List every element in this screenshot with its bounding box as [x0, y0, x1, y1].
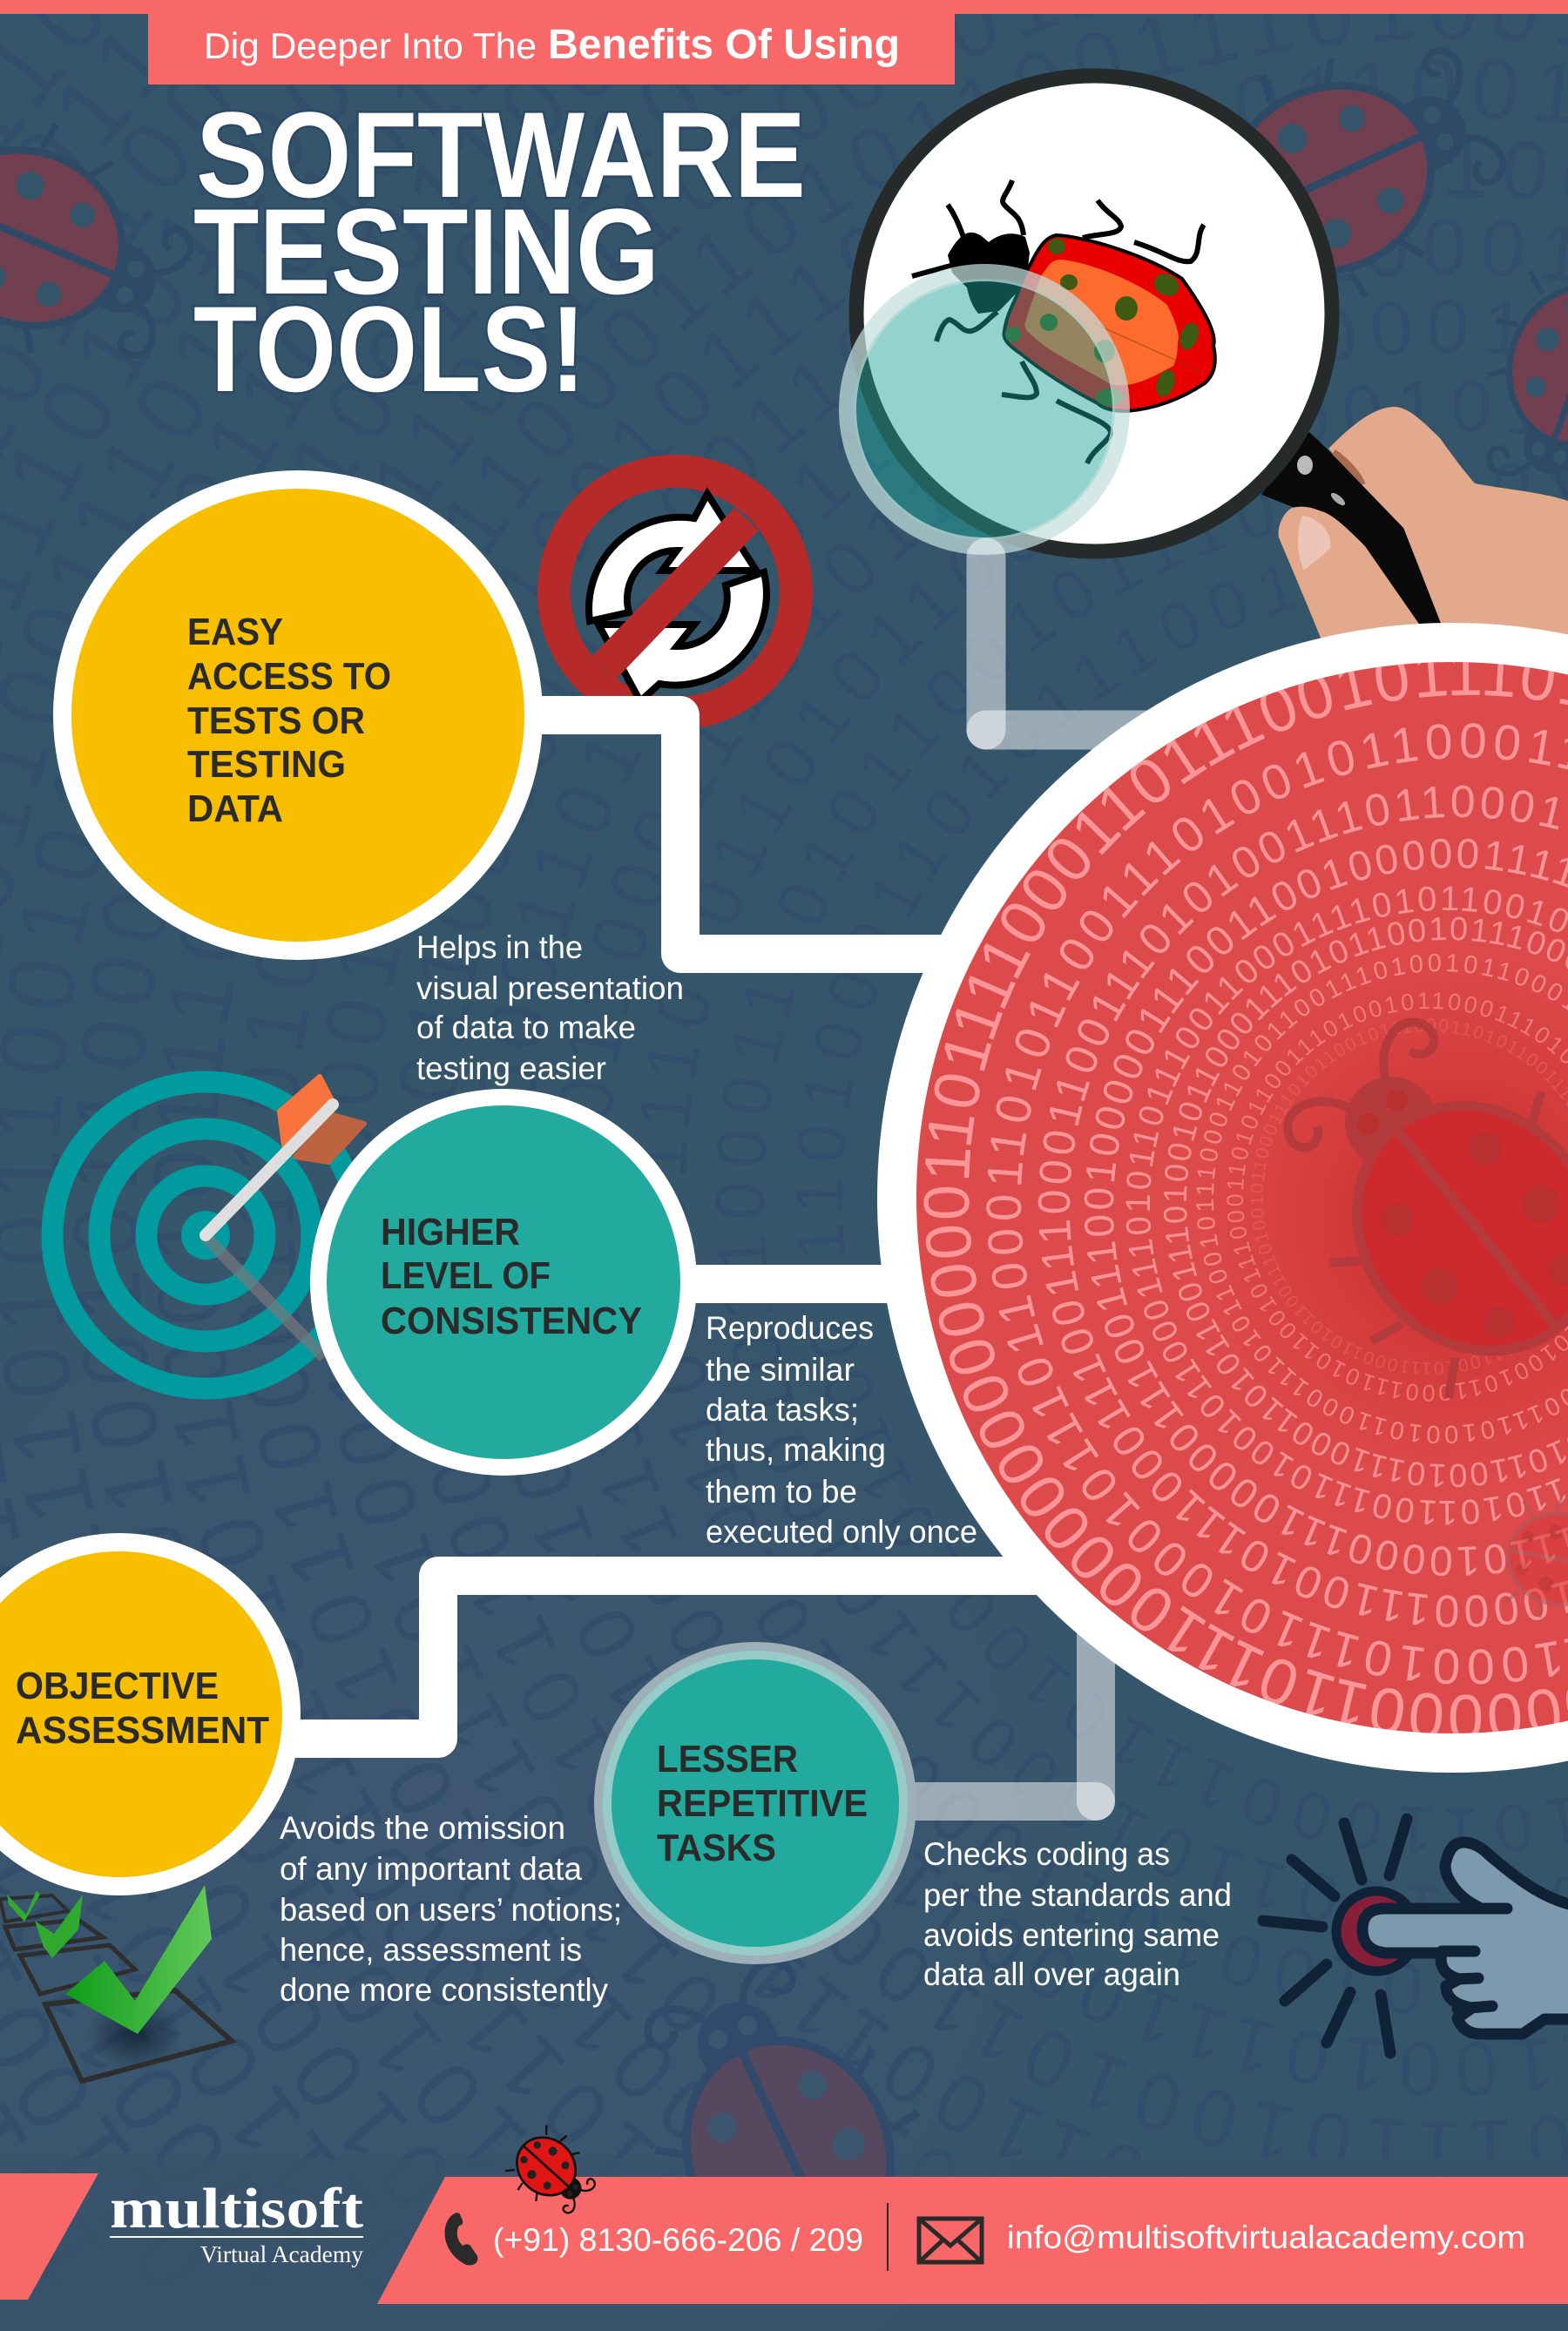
text: avoids the omission: done more consistently [280, 1972, 608, 2008]
text: avoids the omission: of any important data [280, 1851, 582, 1887]
yellow circle: easy access: TESTING [187, 743, 346, 786]
text: reproduces the similar data tasks: executed only once [706, 1514, 977, 1550]
logo: Virtual Academy [200, 2241, 363, 2267]
yellow circle: easy access: DATA [187, 787, 283, 830]
icon: checklist with green tick [0, 1885, 232, 2081]
ladybug in circle [1283, 1017, 1568, 1399]
connector: consistency to main circle [679, 1265, 923, 1303]
teal circle: higher level of consistency [310, 1089, 697, 1476]
text: reproduces the similar data tasks: Reproduces [706, 1310, 874, 1346]
yellow circle: easy access [53, 470, 543, 960]
small ladybug [499, 2118, 607, 2226]
title [193, 86, 806, 417]
icon: hand holding magnifier [1263, 407, 1568, 679]
logo: multisoft [110, 2177, 363, 2240]
faint ladybug: left [0, 93, 215, 405]
icon: target with arrow [52, 1077, 364, 1388]
logo [110, 2177, 363, 2267]
faint ladybug: top right [1186, 0, 1531, 333]
title: SOFTWARE [196, 86, 806, 223]
title: TESTING [193, 183, 659, 320]
banner [148, 9, 955, 84]
teal circle: higher level of consistency: LEVEL OF [381, 1254, 551, 1297]
text: reproduces the similar data tasks: data tasks; [706, 1392, 859, 1428]
yellow circle: easy access: TESTS OR [187, 699, 365, 742]
icon: no sync sign [554, 471, 796, 713]
main circle: binary tunnel with ladybug [877, 623, 1568, 1773]
top bar [0, 0, 1568, 14]
connector: lesser repetitive tasks to main circle [906, 1568, 1096, 1801]
yellow circle: objective assessment: ASSESSMENT [16, 1709, 269, 1752]
ladybug under glass [912, 180, 1215, 463]
teal circle: lesser repetitive tasks: TASKS [657, 1827, 776, 1869]
icon: finger pressing button [1263, 1819, 1568, 2053]
yellow circle: objective assessment: OBJECTIVE [16, 1665, 219, 1707]
text: checks coding: data all over again [923, 1956, 1180, 1992]
footer background [0, 2159, 1568, 2331]
binary rings [923, 662, 1568, 1733]
text: reproduces the similar data tasks: thus, making [706, 1432, 886, 1468]
yellow circle: objective assessment [0, 1533, 301, 1895]
text: checks coding: per the standards and [923, 1877, 1232, 1913]
text: avoids the omission: hence, assessment is [280, 1932, 582, 1968]
text: helps in the visual presentation: Helps in the [416, 929, 583, 965]
text: checks coding: Checks coding as [923, 1836, 1170, 1872]
connector: magnifier to main circle [986, 557, 1237, 730]
email: info@multisoftvirtualacademy.com [1007, 2220, 1525, 2255]
title: TOOLS! [193, 280, 585, 417]
faint ladybug: bottom [591, 1931, 957, 2311]
connector: easy access to main circle [514, 715, 976, 954]
divider [887, 2203, 889, 2271]
text: reproduces the similar data tasks: them to be [706, 1474, 857, 1510]
connector: objective assessment to main circle [287, 1576, 1132, 1739]
text: helps in the visual presentation: visual presentation [416, 970, 684, 1006]
teal circle: higher level of consistency: HIGHER [381, 1211, 520, 1253]
text: checks coding [923, 1836, 1232, 1992]
teal lens [848, 273, 1121, 546]
text: helps in the visual presentation: of data to make [416, 1010, 636, 1045]
teal circle: higher level of consistency: CONSISTENCY [381, 1300, 642, 1342]
icon: phone [445, 2213, 477, 2265]
yellow circle: easy access: ACCESS TO [187, 655, 391, 698]
text: avoids the omission: based on users’ notions; [280, 1892, 622, 1928]
banner: Benefits Of Using [548, 22, 900, 68]
teal circle: lesser repetitive tasks: LESSER [657, 1738, 798, 1780]
icon: envelope [919, 2219, 982, 2262]
faint ladybug in circle [1504, 1497, 1568, 1618]
banner: Dig Deeper Into The [204, 25, 537, 66]
footer contact band [377, 2177, 1568, 2304]
footer left coral accent [0, 2173, 98, 2300]
text: avoids the omission [280, 1810, 622, 2008]
text: helps in the visual presentation: testing easier [416, 1051, 606, 1086]
teal circle: lesser repetitive tasks: REPETITIVE [657, 1782, 868, 1825]
faint ladybug: right edge [1448, 258, 1568, 519]
text: helps in the visual presentation [416, 929, 684, 1086]
text: checks coding: avoids entering same [923, 1917, 1220, 1953]
teal circle: lesser repetitive tasks [594, 1642, 916, 1964]
phone number: (+91) 8130-666-206 / 209 [493, 2222, 863, 2258]
yellow circle: easy access: EASY [187, 611, 283, 653]
magnifier glass [848, 76, 1332, 551]
text: reproduces the similar data tasks: the similar [706, 1352, 855, 1388]
text: reproduces the similar data tasks [706, 1310, 977, 1550]
text: avoids the omission: Avoids the omission [280, 1810, 565, 1846]
